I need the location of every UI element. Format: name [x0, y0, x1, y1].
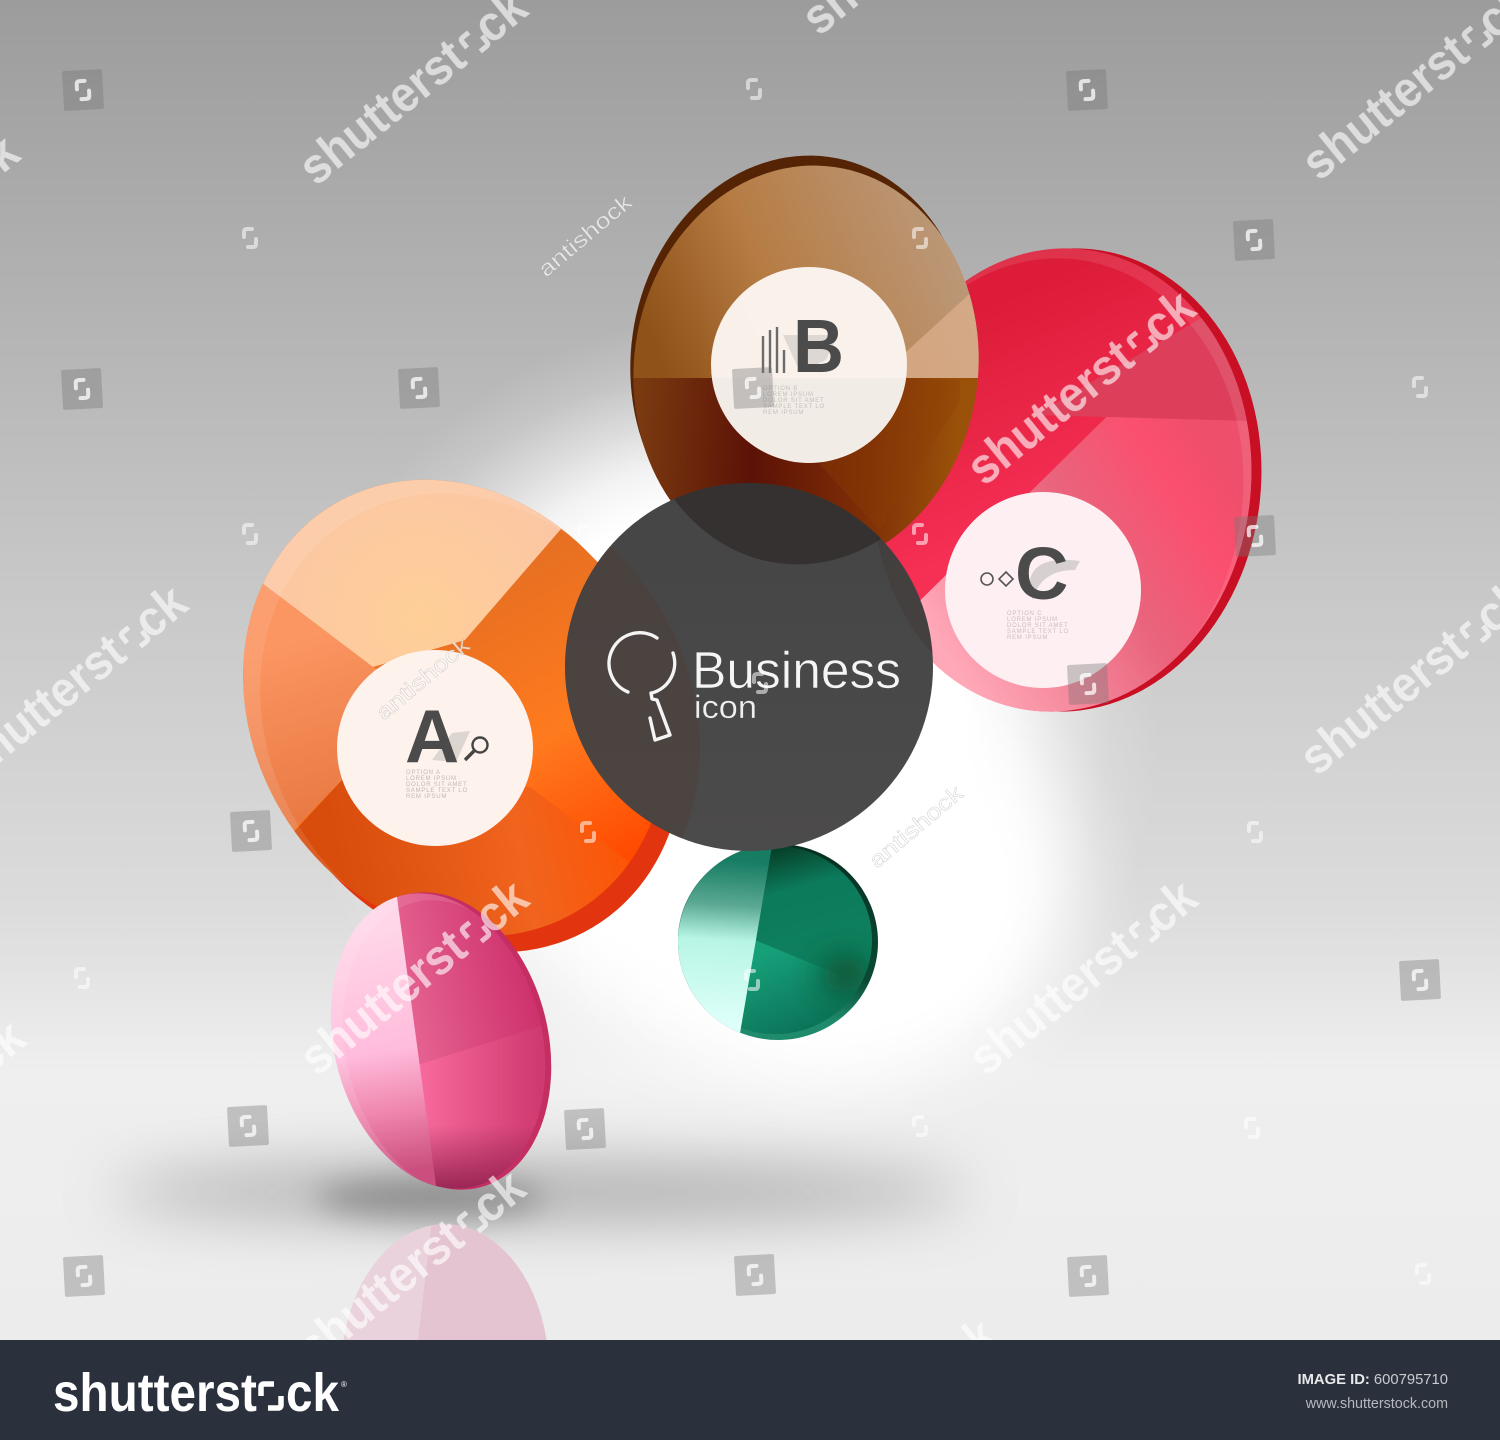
lower-right facet	[920, 321, 1252, 712]
watermark layer: antishock	[864, 780, 968, 873]
registered mark: ®	[341, 1380, 347, 1389]
centre dark circle	[565, 483, 933, 851]
watermark layer: ck	[935, 1307, 1007, 1381]
title: Business	[692, 642, 901, 700]
option text: OPTION C	[1007, 611, 1042, 617]
watermark layer: shutterstock	[958, 868, 1208, 1086]
footer bar	[0, 1340, 1500, 1440]
option text: SAMPLE TEXT LO	[1007, 629, 1069, 635]
floor shadow	[110, 1166, 970, 1218]
lightbulb icon	[609, 633, 675, 740]
letter C: C	[1015, 532, 1068, 615]
watermark layer: antishock	[371, 632, 475, 725]
option text: OPTION A	[406, 770, 441, 776]
dark shadow spot	[821, 957, 869, 993]
rim	[342, 893, 468, 1178]
icon: magnifier	[465, 738, 488, 760]
option text: DOLOR SIT AMET	[1007, 623, 1068, 629]
watermark layer: shutterstock	[286, 1158, 536, 1376]
shadow facet	[783, 335, 838, 372]
upper-right facet	[1036, 318, 1246, 421]
shutterstock logo: shutterstock	[53, 1363, 340, 1423]
letter B: B	[793, 304, 844, 388]
option text: LOREM IPSUM	[1007, 617, 1058, 623]
option text: LOREM IPSUM	[763, 392, 814, 398]
option C badge	[945, 492, 1141, 688]
icon: bars	[763, 327, 784, 373]
shadow facet	[432, 731, 470, 762]
option A badge	[337, 650, 533, 846]
letter A: A	[405, 694, 459, 778]
shadow facet	[1029, 560, 1080, 600]
lower facet	[744, 940, 860, 1034]
image id: IMAGE ID: 600795710	[1297, 1372, 1448, 1388]
lower right facet	[420, 1025, 545, 1189]
rim	[243, 480, 574, 888]
option B badge	[711, 267, 907, 463]
red circle panel C	[885, 248, 1262, 712]
watermark layer: shutterstock	[289, 868, 539, 1086]
overlap tints	[565, 483, 932, 838]
left light facet	[330, 896, 436, 1186]
brown circle panel B	[630, 156, 979, 544]
light left facet	[678, 850, 772, 1032]
option text: REM IPSUM	[406, 794, 447, 800]
option text: REM IPSUM	[1007, 635, 1048, 641]
option text: DOLOR SIT AMET	[406, 782, 467, 788]
option text: REM IPSUM	[763, 410, 804, 416]
upper right facet	[397, 893, 540, 1064]
reflection of pink sphere	[340, 1220, 550, 1340]
orange circle panel A	[243, 480, 670, 952]
lower facet	[294, 780, 630, 936]
option text: DOLOR SIT AMET	[763, 398, 824, 404]
option text: OPTION B	[763, 386, 798, 392]
option text: SAMPLE TEXT LO	[763, 404, 825, 410]
site url: www.shutterstock.com	[1305, 1396, 1448, 1412]
option text: LOREM IPSUM	[406, 776, 457, 782]
watermark layer: shutterstock	[956, 278, 1206, 496]
rim	[966, 248, 1252, 640]
icon: circle and diamond	[981, 572, 1013, 586]
subtitle: icon	[694, 689, 757, 725]
top highlight facet	[263, 480, 562, 667]
green sphere	[678, 845, 878, 1040]
left facet	[243, 584, 377, 830]
watermark layer: antishock	[533, 189, 637, 282]
pink sphere	[330, 892, 552, 1190]
option text: SAMPLE TEXT LO	[406, 788, 468, 794]
